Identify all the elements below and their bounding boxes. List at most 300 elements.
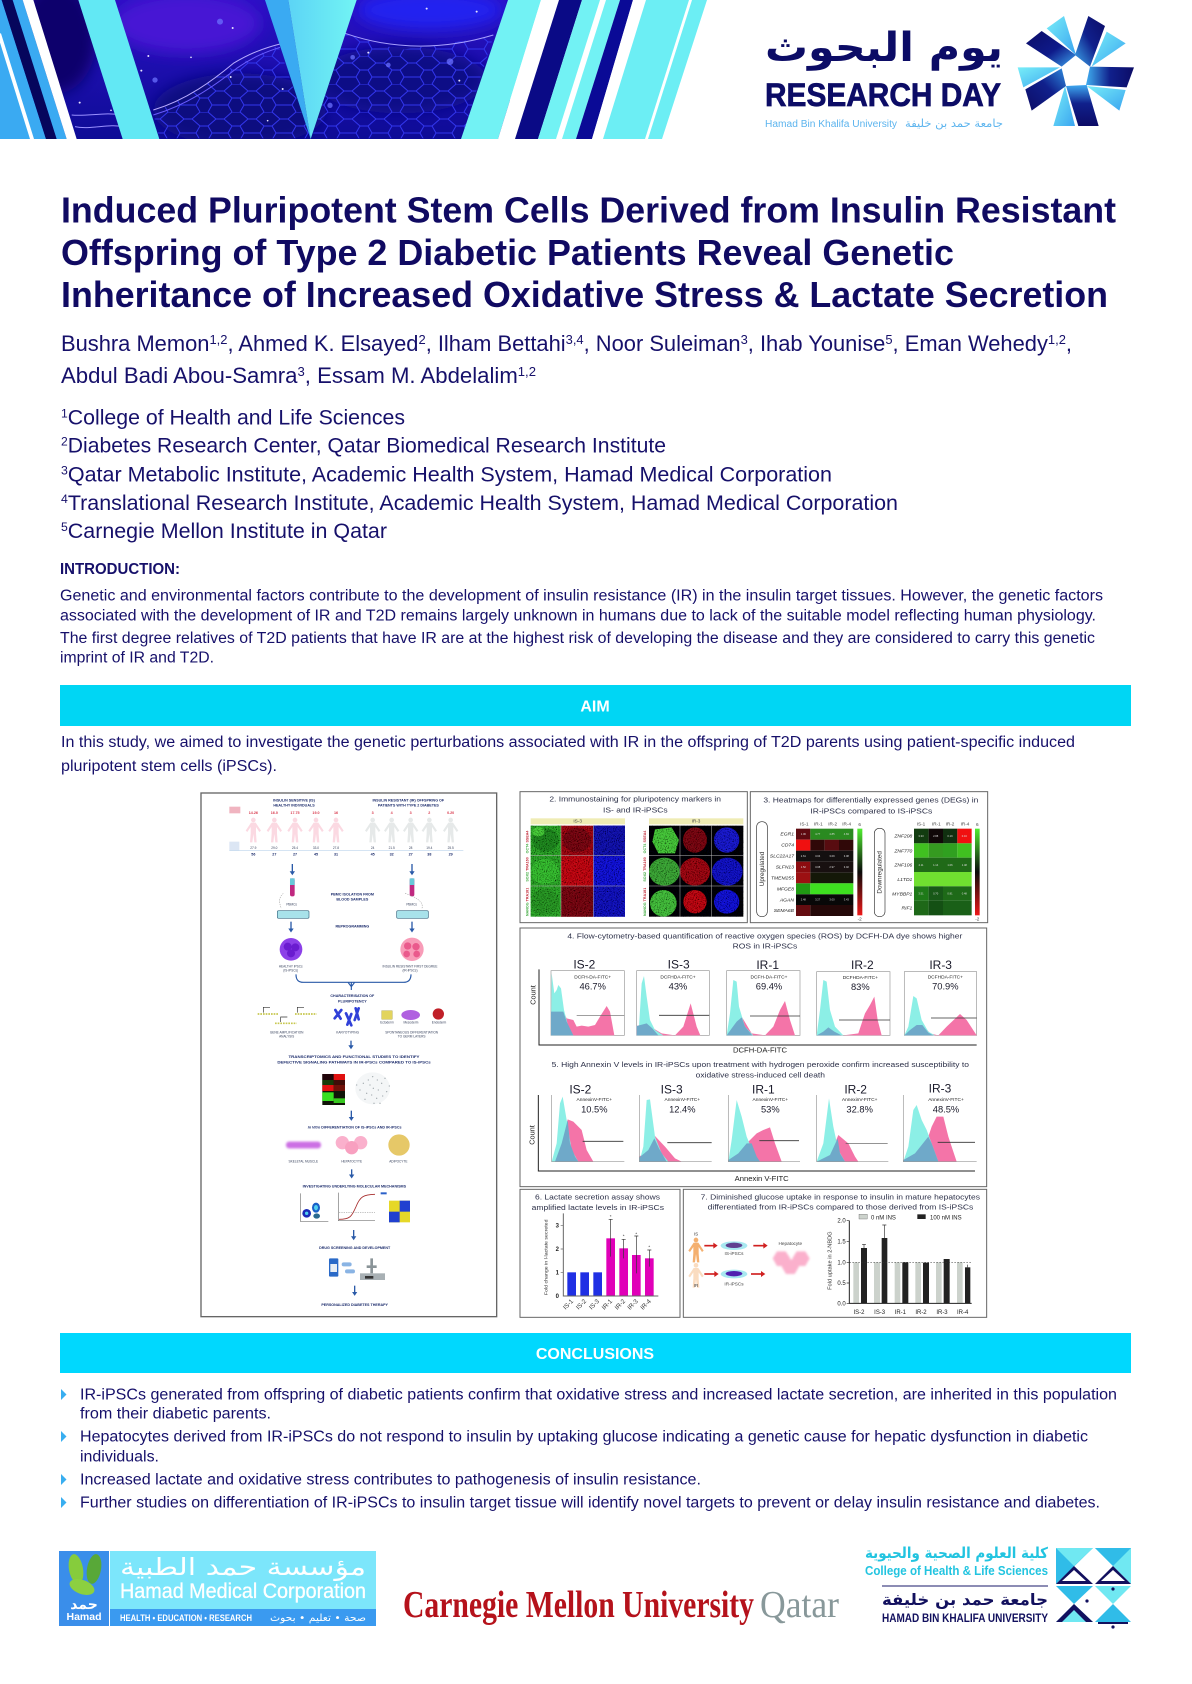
heatmap: upregulated: 4.77 [815,832,821,836]
plot: ROS IS-3: 43% [669,981,687,991]
plot: ROS IR-3: 70.9% [932,981,959,991]
heatmap: downregulated: 2.88 [933,834,939,838]
panel: immunostaining [520,792,747,923]
micrographs: IS-3: SOX2 TRA160 [525,857,529,882]
cohort people and values: 28 [409,846,413,850]
authors: 1,2 [1048,332,1066,347]
cohort people and values: 19.0 [312,811,320,815]
heatmap: downregulated: ZNF208 [893,834,913,840]
panel 7 heading [701,1192,980,1211]
chart: growth curve thumbnail [338,1193,375,1221]
text: characterisation [330,994,375,1003]
bar chart: glucose uptake: IR-2 [915,1310,927,1316]
affiliations: 1 [61,406,68,420]
arrow: to mechanisms [350,1169,354,1177]
icons: differentiated cells: ADIPOCYTE [389,1160,407,1164]
panel 4 heading: 4. Flow-cytometry-based quantification of reactive oxygen species (ROS) by DCFH-DA dye shows higher [567,931,963,940]
bullet 2 [61,1429,1088,1466]
logo: Hamad Medical Corporation: HEALTH • EDUCATION • RESEARCH [120,1613,252,1623]
icons: gene amplification [258,1007,317,1023]
heatmap: downregulated: IR-2 [946,822,955,827]
bullet 1: from their diabetic parents. [80,1406,271,1423]
logo: Research Day: Hamad Bin Khalifa University [765,119,897,130]
heatmap: upregulated: 3.43 [844,898,849,902]
micrographs: IR-3: IR-3 [692,819,701,824]
bar chart: glucose uptake: 100 nM INS [930,1215,962,1221]
plot: Annexin IR-2: 32.8% [846,1104,873,1114]
labels: iPSC lines: (IS-iPSCs) [283,969,298,973]
authors: 5 [885,332,893,347]
cohort headers: PATIENTS WITH TYPE 2 DIABETES [378,804,439,808]
aim text: pluripotent stem cells (iPSCs). [61,758,277,775]
bar chart: lactate: 0 [556,1294,560,1300]
text: transcriptomics: DEFECTIVE SIGNALING PATHWAYS IN IR-iPSCs COMPARED TO IS-iPSCs [277,1061,431,1065]
logo: College of Health & Life Sciences, HBKU: جامعة حمد بن خليفة [882,1590,1048,1609]
network thumbnail [355,1072,390,1104]
logo: Hamad Medical Corporation: Hamad Medical Corporation [120,1580,366,1603]
heatmap: upregulated: SLFN13 [776,865,794,871]
micrographs: IS-3: IS-3 [573,819,582,824]
authors [61,331,1072,388]
text: reprogramming: REPROGRAMMING [335,924,369,928]
cohort headers: INSULIN SENSITIVE (IS) [273,798,316,802]
labels: iPSC lines: INSULIN RESISTANT FIRST DEGREE [383,965,437,969]
plot: Annexin IR-2: AnnexinV-FITC+ [842,1097,878,1103]
text: transcriptomics: TRANSCRIPTOMICS AND FUNCTIONAL STUDIES TO IDENTIFY [288,1055,420,1059]
heatmap: downregulated: L1TD1 [897,877,913,883]
section bar: conclusions [60,1333,1131,1373]
heatmap: downregulated: 3.33 [918,834,924,838]
bar chart: lactate: Fold change in l-lactate secreted [544,1219,550,1295]
plot: ROS IS-2: 46.7% [579,981,606,991]
heatmap: downregulated: 0.16 [962,834,967,838]
cohort headers: HEALTHY INDIVIDUALS [273,804,315,808]
cohort people and values: 21.5 [389,846,395,850]
bullet 2: individuals. [80,1449,159,1466]
panel 2 heading: IS- and IR-iPSCs [603,805,668,814]
cohort headers: INSULIN RESISTANT (IR) OFFSPRING OF [373,798,445,802]
plot: Annexin IR-1: IR-1 [752,1082,775,1096]
schematic: iPSC to hepatocyte: IS-iPSCs [725,1251,744,1256]
cohort people and values: 31 [334,852,338,856]
logo: Research Day [765,16,1134,130]
heatmap: downregulated: Downregulated [877,851,884,894]
heatmap: downregulated: 1.48 [962,863,967,867]
heatmap: upregulated: 2.97 [829,865,835,869]
heatmap: downregulated: MYBBP1 [892,891,913,897]
bar chart: glucose uptake: 1.5 [837,1240,846,1246]
heatmap: downregulated: IR-4 [961,822,970,827]
icons: blood tubes [290,878,414,896]
heatmap: downregulated: 0.48 [962,892,967,896]
plot: ROS IR-2: DCFHDA-FITC+ [843,975,878,981]
bar chart: glucose uptake: IR-4 [957,1310,969,1316]
plot: ROS IS-3: IS-3 [668,957,690,971]
cohort people and values: 16.0 [271,811,278,815]
heatmap: upregulated: MFGE8 [777,886,794,892]
heatmap: upregulated: IR-1 [814,822,823,827]
logo: College of Health & Life Sciences, HBKU: HAMAD BIN KHALIFA UNIVERSITY [882,1613,1048,1625]
affiliations: Translational Research Institute, Academic Health System, Hamad Medical Corporation [68,492,898,515]
plot: Annexin IR-3: 48.5% [933,1104,959,1114]
cohort people and values: 45 [371,852,375,856]
panel 7 heading: 7. Diminished glucose uptake in response to insulin in mature hepatocytes [701,1192,980,1201]
logo: Carnegie Mellon University Qatar: Qatar [760,1584,839,1626]
micrographs: IR-3: NANOG TRA181 [643,888,647,916]
plot: ROS IS-2: DCFH-DA-FITC+ [574,974,611,980]
authors: , [1066,331,1072,356]
introduction text: Genetic and environmental factors contribute to the development of insulin resistance (IR) in the insulin target tissues. However, the genetic factors [60,588,1103,605]
plot: Annexin IR-3 [903,1081,977,1162]
cohort headers [273,798,445,808]
schematic: iPSC to hepatocyte [688,1231,810,1288]
cohort people and values: 27 [293,852,297,856]
bar chart: glucose uptake: 0.5 [837,1281,846,1287]
panel 3 heading [763,796,978,815]
cohort people and values: 33.0 [313,846,319,850]
panel: heatmaps [750,792,988,923]
logo: College of Health & Life Sciences, HBKU [865,1544,1131,1629]
text: therapy: PERSONALIZED DIABETES THERAPY [321,1303,389,1307]
heatmap: upregulated: SEMA6B [774,908,795,914]
plot: ROS IS-2 [551,957,624,1035]
heatmap: downregulated: IR-1 [932,822,941,827]
labels: iPSC lines: (IR-iPSCs) [402,969,418,973]
panel 3 heading: 3. Heatmaps for differentially expressed genes (DEGs) in [763,796,978,805]
panel 3 heading: IR-iPSCs compared to IS-iPSCs [810,806,933,815]
panels 4 and 5 [520,928,987,1187]
plot: Annexin IR-1: AnnexinV-FITC+ [753,1097,788,1103]
labels: characterisation assays: SPONTANEOUS DIFFERENTIATION [385,1030,439,1034]
heatmap: upregulated: 1.06 [801,832,806,836]
cohort people and values: 0.20 [447,811,454,815]
bar chart: lactate: 1 [556,1270,560,1276]
authors: , Essam M. Abdelalim [305,363,518,388]
affiliations: 2 [61,435,68,449]
lower workflow [286,1072,410,1307]
icons: karyotype chromosomes [335,1008,359,1025]
panel 2 heading: 2. Immunostaining for pluripotency markers in [549,795,721,804]
bullet 4: Further studies on differentiation of IR-iPSCs to insulin target tissue will identify novel targets to prevent or delay insulin resistance and diabetes. [80,1495,1100,1512]
logo: College of Health & Life Sciences, HBKU: College of Health & Life Sciences [865,1563,1048,1578]
cohort people and values: 25.4 [292,846,298,850]
arrow: to differentiation [349,1111,353,1119]
arrows: dishes to iPSC [291,922,412,931]
heatmap: upregulated: 2.61 [801,854,806,858]
cohort people and values: 27.8 [333,846,339,850]
bar chart: lactate: IS-3 [588,1298,601,1311]
labels: characterisation assays: ANALYSIS [279,1034,294,1038]
panel 5 heading: 5. High Annexin V levels in IR-iPSCs upon treatment with hydrogen peroxide confirm increased susceptibility to [552,1060,969,1069]
plot: Annexin IR-3: IR-3 [929,1081,952,1095]
heatmap: downregulated: 1.06 [947,863,953,867]
heatmap: upregulated: 3.08 [844,854,849,858]
logo: Hamad Medical Corporation: Hamad [66,1611,102,1623]
labels: characterisation assays: TO GERM LAYERS [398,1034,426,1038]
micrographs: IS-3: NANOG TRA181 [525,888,529,916]
labels: iPSC lines: HEALTHY iPSCs [279,965,303,969]
logo: Research Day: جامعة حمد بن خليفة [905,117,1003,130]
plot: ROS IR-2 [817,958,890,1035]
panel: glucose uptake [683,1189,987,1317]
schematic: iPSC to hepatocyte: Hepatocyte [779,1241,803,1246]
heatmap: upregulated: EGR1 [780,832,794,838]
affiliations: Qatar Metabolic Institute, Academic Health System, Hamad Medical Corporation [68,463,832,486]
heatmap: downregulated: 0.19 [947,834,953,838]
plot: Annexin IS-3 [639,1082,712,1162]
plot: Annexin IS-2: IS-2 [569,1082,592,1096]
bar chart: glucose uptake: 0 nM INS [871,1215,896,1221]
arrow: to therapy [353,1286,357,1294]
cohort people and values: 25.5 [448,846,454,850]
heatmap: upregulated: SLC22A17 [770,854,794,860]
heatmap: upregulated: 3.09 [829,854,835,858]
plot: Annexin IS-3: IS-3 [661,1082,683,1096]
icons: iPSC colonies [280,938,424,961]
heatmap: downregulated [874,822,980,922]
text: drug screening: DRUG SCREENING AND DEVELOPMENT [319,1246,391,1250]
text: transcriptomics [277,1055,431,1065]
title: Induced Pluripotent Stem Cells Derived from Insulin Resistant [61,190,1116,230]
authors: 3 [741,332,748,347]
heatmap: upregulated: IR-2 [828,822,837,827]
plot: Annexin IR-1: 53% [761,1104,780,1114]
bar chart: lactate: IR-1 [601,1298,614,1312]
labels: characterisation assays: KARYOTYPING [336,1030,360,1034]
title [61,190,1116,315]
heatmap: upregulated: IS-1 [800,822,809,827]
bar chart: glucose uptake [827,1214,972,1316]
cohort people and values: 16 [334,811,338,815]
icons: culture dishes [277,893,428,918]
plot: ROS IR-1: 69.4% [756,981,782,991]
chart: ROS flow cytometry [528,957,977,1055]
bullet 1: IR-iPSCs generated from offspring of diabetic patients confirm that oxidative stress and increased lactate secretion, are inherited in this population [80,1386,1117,1403]
plot: ROS IR-1: IR-1 [756,958,779,972]
title: Offspring of Type 2 Diabetic Patients Reveal Genetic [61,232,954,273]
plot: Annexin IS-2: AnnexinV-FITC+ [577,1097,612,1103]
cohort people and values: 29.0 [271,846,278,850]
heatmap: upregulated: CD74 [781,843,794,849]
heatmap: upregulated: IR-4 [842,822,851,827]
plot: Annexin IR-3: AnnexinV-FITC+ [928,1097,964,1103]
micrographs: IS-3: OCT4 SSEA4 [525,830,529,853]
header banner [0,0,707,147]
cohort people and values: 56 [251,852,255,856]
panel 7 heading: differentiated from IR-iPSCs compared to those derived from IS-iPSCs [708,1202,974,1211]
heatmap: upregulated: 3.27 [815,898,821,902]
plot: Annexin IS-3: 12.4% [669,1104,696,1114]
heatmap: downregulated: 0.70 [933,892,939,896]
authors: 1,2 [518,364,536,379]
cohort people and values: 27 [272,852,276,856]
section bar: aim [60,685,1131,726]
heatmap: upregulated: TMEM255 [771,876,794,882]
heatmap: downregulated: -2 [975,917,980,922]
micrographs: IR-3: SOX2 TRA160 [643,857,647,882]
plot: ROS IR-3: IR-3 [929,958,952,972]
bar chart: lactate [544,1213,658,1312]
text: characterisation: PLURIPOTENCY [338,999,367,1003]
heatmap: upregulated: 4.84 [844,832,849,836]
logo: College of Health & Life Sciences, HBKU: كلية العلوم الصحية والحيوية [865,1544,1048,1562]
heatmap: upregulated: 3.08 [815,865,821,869]
bullet 2: Hepatocytes derived from IR-iPSCs do not respond to insulin by uptaking glucose indicating a genetic cause for hepatic dysfunction in diabetic [80,1429,1088,1446]
plot: ROS IS-3 [637,957,709,1035]
section bar: aim: AIM [580,699,610,716]
chart: ROS flow cytometry: DCFH-DA-FITC [733,1046,787,1055]
text: PBMC isolation: PBMC ISOLATION FROM [331,892,374,896]
plot: ROS IR-1: DCFH-DA-FITC+ [751,974,788,980]
cohort people and values: 3 [410,811,412,815]
bullet 1 [61,1386,1117,1423]
icons: bottle pills microscope [329,1258,385,1280]
bar chart: lactate: 3 [556,1224,560,1230]
heatmap: upregulated: 1.52 [801,865,806,869]
plot: Annexin IS-2: 10.5% [581,1104,608,1114]
panel: lactate [520,1189,680,1317]
plot: ROS IS-2: IS-2 [573,957,596,971]
bar chart: glucose uptake: IR-3 [936,1310,948,1316]
affiliations: 5 [61,520,68,534]
plot: ROS IR-2: IR-2 [851,958,874,972]
logo: Hamad Medical Corporation: صحة • تعليم • بحوث [270,1613,366,1624]
chart: flow scatter thumbnail [301,1193,328,1222]
heatmap thumbnail [322,1074,345,1105]
heatmap: downregulated: ZNF770 [893,848,913,854]
bar chart: lactate: IR-2 [614,1298,627,1312]
affiliations: 3 [61,463,68,477]
logo: Hamad Medical Corporation: حمد [70,1597,98,1613]
heatmap: upregulated: 3.04 [815,854,821,858]
cohort people and values: 27 [409,852,413,856]
bar chart: lactate: * [610,1214,612,1219]
cohort people and values: 4 [391,811,394,815]
bar chart: glucose uptake: IR-1 [895,1310,907,1316]
heading: introduction: INTRODUCTION: [60,561,180,578]
bullet 3: Increased lactate and oxidative stress contributes to pathogenesis of insulin resistance. [80,1471,701,1488]
cohort people and values: 38 [427,852,431,856]
authors: 3,4 [566,332,584,347]
heatmap: upregulated: 2.48 [801,898,806,902]
authors: , Eman Wehedy [893,331,1048,356]
bracket: merge to characterisation [296,974,411,990]
introduction text: associated with the development of IR and T2D remains largely unknown in humans due to lack of the suitable model reflecting human physiology. [60,608,1096,625]
introduction text: The first degree relatives of T2D patients that have IR are at the highest risk of developing the disease and they are considered to carry this genetic [60,630,1095,647]
conclusions list [61,1386,1117,1512]
text: PBMC isolation [286,892,417,907]
icon: HBKU emblem [1056,1548,1131,1629]
panel 2 heading [549,795,721,814]
icons: differentiated cells: SKELETAL MUSCLE [289,1160,318,1164]
micrographs: IS-3 [525,818,625,917]
bar chart: lactate: IR-4 [639,1298,653,1312]
micrographs: IR-3: OCT4 SSEA4 [643,830,647,853]
heatmap: upregulated: 3.00 [829,898,835,902]
bar chart: lactate: * [635,1231,637,1236]
panel 6 heading: amplified lactate levels in IR-iPSCs [532,1203,664,1212]
logo: Hamad Medical Corporation: مؤسسة حمد الطبية [120,1553,366,1581]
heatmap: downregulated: 1.14 [933,863,939,867]
title: Inheritance of Increased Oxidative Stress & Lactate Secretion [61,274,1108,315]
icons: differentiated cells [286,1134,410,1164]
introduction text [60,588,1103,667]
bar chart: glucose uptake: IS-3 [874,1310,886,1316]
bar chart: glucose uptake: 1.0 [837,1260,846,1266]
arrow: to transcriptomics [349,1041,353,1047]
bar chart: lactate: * [623,1233,625,1238]
icons: germ layers: Endoderm [432,1020,447,1024]
heatmap: downregulated: 6 [976,822,979,827]
cohort people and values: 19.4 [426,846,433,850]
authors: 1,2 [209,332,227,347]
heatmap: upregulated: 6 [858,822,861,827]
plot: ROS IR-3: DCFHDA-FITC+ [928,974,963,980]
panel 6 heading: 6. Lactate secretion assay shows [535,1192,660,1201]
micrographs: IR-3 [643,818,743,917]
labels: characterisation assays: GENE AMPLIFICATION [270,1030,304,1034]
arrows: cohort to blood samples [292,864,412,873]
aim text: In this study, we aimed to investigate the genetic perturbations associated with IR in the offspring of T2D parents using patient-specific induced [61,734,1075,751]
panel 4 heading: ROS in IR-iPSCs [733,941,798,950]
plot: Annexin IS-2 [552,1082,624,1162]
bar chart: glucose uptake: IS-2 [854,1310,865,1316]
text: mechanisms: INVESTIGATING UNDERLYING MOLECULAR MECHANISMS [303,1184,407,1188]
plot: Annexin IR-2 [817,1082,888,1162]
chart: correlation matrix thumbnail [381,1192,410,1222]
affiliations: 4 [61,492,68,506]
bar chart: lactate: IS-2 [575,1298,588,1311]
heatmap: upregulated [757,822,862,922]
affiliations [61,406,898,543]
authors: Abdul Badi Abou-Samra [61,363,296,388]
plot: Annexin IR-2: IR-2 [844,1082,867,1096]
bar chart: glucose uptake: 2.0 [837,1219,846,1225]
heatmap: downregulated: RIF1 [902,906,913,912]
aim text [61,734,1075,775]
affiliations: College of Health and Life Sciences [68,406,405,429]
introduction text: imprint of IR and T2D. [60,650,214,667]
authors: , Ihab Younise [748,331,885,356]
schematic: iPSC to hepatocyte: IS [694,1231,698,1236]
bar chart: lactate: IR-3 [626,1298,640,1312]
heatmap: upregulated: Upregulated [759,851,766,886]
heatmap: downregulated: IS-1 [917,822,926,827]
icons: germ layers: Ectoderm [380,1020,394,1024]
icon: star emblem [1018,16,1134,126]
panel: study workflow [201,793,497,1317]
heatmap: downregulated: 3.51 [918,892,924,896]
logo: Research Day: يوم البحوث [765,25,1003,71]
icons: germ layers [380,1008,447,1024]
heatmap: downregulated: 0.81 [947,892,953,896]
labels: characterisation assays [270,1030,439,1038]
plot: ROS IS-3: DCFHDA-FITC+ [660,974,696,980]
authors: Bushra Memon [61,331,210,356]
authors: 2 [418,332,426,347]
schematic: iPSC to hepatocyte: IR-iPSCs [724,1282,744,1287]
cohort people and values: 3 [372,811,374,815]
cohort people and values: 14.26 [249,811,258,815]
plot: ROS IR-1 [727,958,800,1035]
chart: Annexin V flow cytometry: Annexin V-FITC [735,1174,789,1183]
panel 4 heading [567,931,963,950]
logo: Hamad Medical Corporation [59,1551,376,1626]
heatmap: upregulated: -2 [858,917,862,922]
plot: ROS IR-3 [904,958,977,1035]
cohort people and values: 27.9 [250,846,257,850]
cohort people and values: 29 [449,852,453,856]
